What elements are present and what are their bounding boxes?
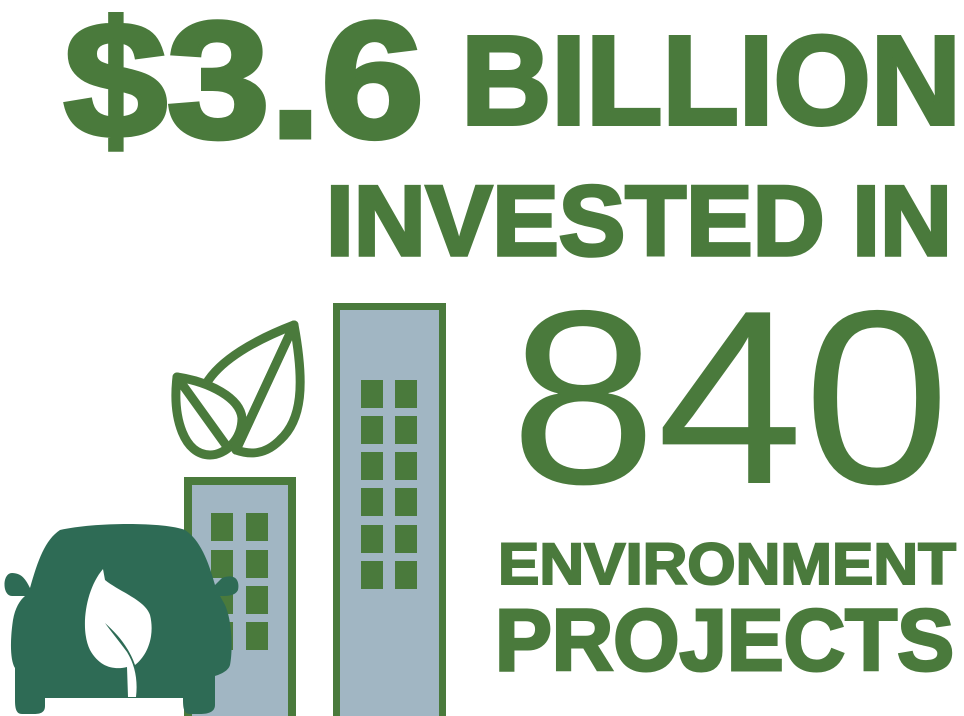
heading: BILLION: BILLION xyxy=(461,10,961,151)
illustration: tall building xyxy=(336,306,442,716)
text: PROJECTS: PROJECTS xyxy=(495,592,954,689)
icon: leaves outline xyxy=(176,325,300,455)
illustration: short building xyxy=(188,481,292,716)
big number: 840: 840 xyxy=(510,258,950,536)
icon: white leaf xyxy=(85,569,152,697)
heading: INVESTED IN: INVESTED IN xyxy=(326,165,952,276)
icon: car with leaf xyxy=(4,524,238,714)
text: ENVIRONMENT: ENVIRONMENT xyxy=(498,532,956,597)
